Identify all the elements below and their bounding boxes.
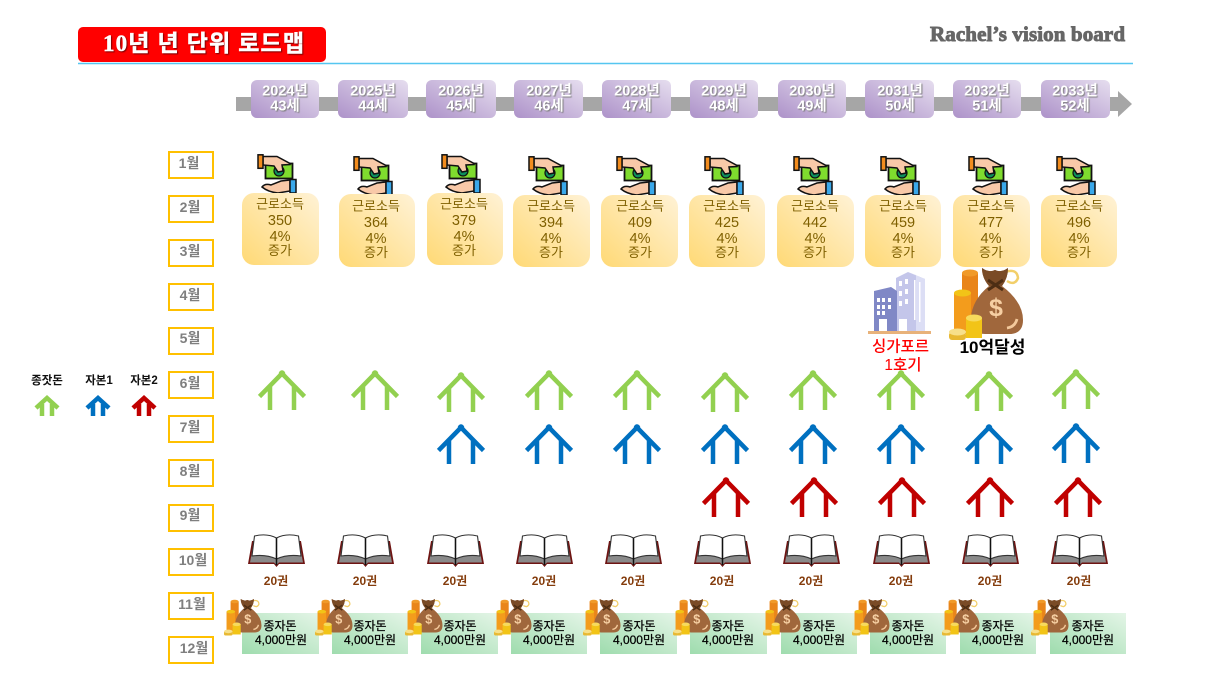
legend: 자본1 — [85, 374, 113, 387]
earned income cards: 4% — [366, 231, 387, 247]
earned income cards: 증가 — [452, 243, 476, 258]
seed money boxes — [224, 599, 1126, 654]
timeline year labels: 50세 — [885, 98, 915, 114]
earned income cards: 350 — [268, 213, 292, 229]
month labels column: 10월 — [179, 552, 207, 568]
earned income cards: 4% — [1069, 231, 1090, 247]
earned income cards: 4% — [541, 231, 562, 247]
earned income cards: 증가 — [1067, 245, 1091, 260]
milestone: Singapore shop building — [868, 272, 931, 374]
earned income cards: 442 — [803, 215, 827, 231]
month labels column — [169, 152, 213, 663]
timeline year labels: 47세 — [622, 98, 652, 114]
books read per year: 20권 — [621, 574, 645, 588]
seed money boxes: 종자돈 — [353, 619, 387, 633]
timeline year labels: 43세 — [270, 98, 300, 114]
earned income cards: 4% — [270, 229, 291, 245]
month labels column: 8월 — [180, 463, 200, 479]
month labels column: 6월 — [180, 375, 200, 391]
month labels column: 9월 — [180, 507, 200, 523]
title banner — [78, 27, 326, 62]
timeline year labels — [251, 80, 1110, 118]
seed money boxes: 종자돈 — [532, 619, 566, 633]
seed money boxes: 종자돈 — [443, 619, 477, 633]
timeline year labels: 2024년 — [262, 82, 308, 100]
month labels column: 2월 — [180, 199, 200, 215]
books read per year: 20권 — [443, 574, 467, 588]
earned income cards: 496 — [1067, 215, 1091, 231]
timeline year labels: 51세 — [972, 98, 1002, 114]
capital 1 arrows (blue) — [438, 423, 1098, 464]
timeline year labels: 2025년 — [350, 82, 396, 100]
earned income cards: 364 — [364, 215, 388, 231]
earned income cards: 증가 — [268, 243, 292, 258]
timeline year labels: 2028년 — [614, 82, 660, 100]
seed money boxes: 종자돈 — [1071, 619, 1105, 633]
timeline year labels: 44세 — [358, 98, 388, 114]
books read per year: 20권 — [353, 574, 377, 588]
books read per year: 20권 — [1067, 574, 1091, 588]
seed money boxes: 4,000만원 — [523, 633, 575, 647]
earned income cards: 증가 — [715, 245, 739, 260]
timeline year labels: 2031년 — [877, 82, 923, 100]
month labels column: 12월 — [180, 640, 208, 656]
seed money boxes: 4,000만원 — [1062, 633, 1114, 647]
earned income cards: 증가 — [803, 245, 827, 260]
earned income cards: 477 — [979, 215, 1003, 231]
milestone: reaching 1 billion won: 10억달성 — [960, 338, 1025, 357]
timeline year labels: 2032년 — [964, 82, 1010, 100]
legend — [31, 374, 158, 416]
income icons: hands with money — [258, 155, 1095, 195]
earned income cards: 근로소득 — [256, 196, 304, 212]
seed money boxes: 4,000만원 — [702, 633, 754, 647]
earned income cards: 4% — [717, 231, 738, 247]
milestone: Singapore shop building: 1호기 — [884, 356, 922, 374]
subtitle: Rachel's vision board: Rachel’s vision board — [930, 22, 1125, 46]
capital 2 arrows (red) — [704, 477, 1100, 517]
books read per year: 20권 — [710, 574, 734, 588]
seed money boxes: 4,000만원 — [434, 633, 486, 647]
earned income cards: 증가 — [539, 245, 563, 260]
seed money boxes: 4,000만원 — [972, 633, 1024, 647]
seed money boxes: 종자돈 — [981, 619, 1015, 633]
earned income cards: 근로소득 — [1055, 198, 1103, 214]
seed money boxes: 종자돈 — [802, 619, 836, 633]
month labels column: 3월 — [180, 243, 200, 259]
month labels column: 11월 — [178, 596, 206, 612]
timeline year labels: 2027년 — [526, 82, 572, 100]
earned income cards: 증가 — [364, 245, 388, 260]
timeline year labels: 46세 — [534, 98, 564, 114]
earned income cards: 4% — [805, 231, 826, 247]
milestone: Singapore shop building: 싱가포르 — [872, 338, 929, 356]
earned income cards: 459 — [891, 215, 915, 231]
seed money boxes: 종자돈 — [622, 619, 656, 633]
earned income cards: 근로소득 — [616, 198, 664, 214]
timeline year labels: 52세 — [1060, 98, 1090, 114]
books read per year: 20권 — [264, 574, 288, 588]
earned income cards: 근로소득 — [703, 198, 751, 214]
legend: 자본2 — [130, 374, 158, 387]
month labels column: 4월 — [180, 287, 200, 303]
seed money boxes: 종자돈 — [263, 619, 297, 633]
earned income cards — [242, 193, 1117, 267]
earned income cards: 4% — [893, 231, 914, 247]
earned income cards: 증가 — [628, 245, 652, 260]
earned income cards: 근로소득 — [967, 198, 1015, 214]
earned income cards: 394 — [539, 215, 563, 231]
earned income cards: 4% — [630, 231, 651, 247]
timeline year labels: 2033년 — [1052, 82, 1098, 100]
earned income cards: 근로소득 — [791, 198, 839, 214]
legend: 종잣돈 — [31, 374, 63, 387]
seed money boxes: 종자돈 — [711, 619, 745, 633]
books read per year: 20권 — [799, 574, 823, 588]
earned income cards: 4% — [454, 229, 475, 245]
earned income cards: 근로소득 — [879, 198, 927, 214]
timeline year labels: 49세 — [797, 98, 827, 114]
month labels column: 5월 — [180, 330, 200, 346]
timeline year labels: 2030년 — [789, 82, 835, 100]
earned income cards: 증가 — [891, 245, 915, 260]
milestone: reaching 1 billion won — [949, 268, 1025, 357]
timeline year labels: 2029년 — [701, 82, 747, 100]
timeline year labels: 48세 — [709, 98, 739, 114]
month labels column: 7월 — [180, 419, 200, 435]
timeline year labels: 2026년 — [438, 82, 484, 100]
title banner: 10년 년 단위 로드맵 — [103, 31, 304, 56]
seed money boxes: 4,000만원 — [882, 633, 934, 647]
earned income cards: 증가 — [979, 245, 1003, 260]
timeline arrow — [236, 91, 1132, 117]
earned income cards: 4% — [981, 231, 1002, 247]
month labels column: 1월 — [179, 155, 199, 171]
earned income cards: 근로소득 — [352, 198, 400, 214]
earned income cards: 근로소득 — [440, 196, 488, 212]
books read per year: 20권 — [889, 574, 913, 588]
timeline year labels: 45세 — [446, 98, 476, 114]
seed money arrows (green) — [260, 369, 1098, 412]
books read per year — [248, 535, 1108, 588]
earned income cards: 409 — [628, 215, 652, 231]
seed money boxes: 4,000만원 — [344, 633, 396, 647]
earned income cards: 근로소득 — [527, 198, 575, 214]
earned income cards: 379 — [452, 213, 476, 229]
seed money boxes: 4,000만원 — [255, 633, 307, 647]
seed money boxes: 4,000만원 — [613, 633, 665, 647]
seed money boxes: 종자돈 — [891, 619, 925, 633]
earned income cards: 425 — [715, 215, 739, 231]
seed money boxes: 4,000만원 — [793, 633, 845, 647]
books read per year: 20권 — [978, 574, 1002, 588]
books read per year: 20권 — [532, 574, 556, 588]
